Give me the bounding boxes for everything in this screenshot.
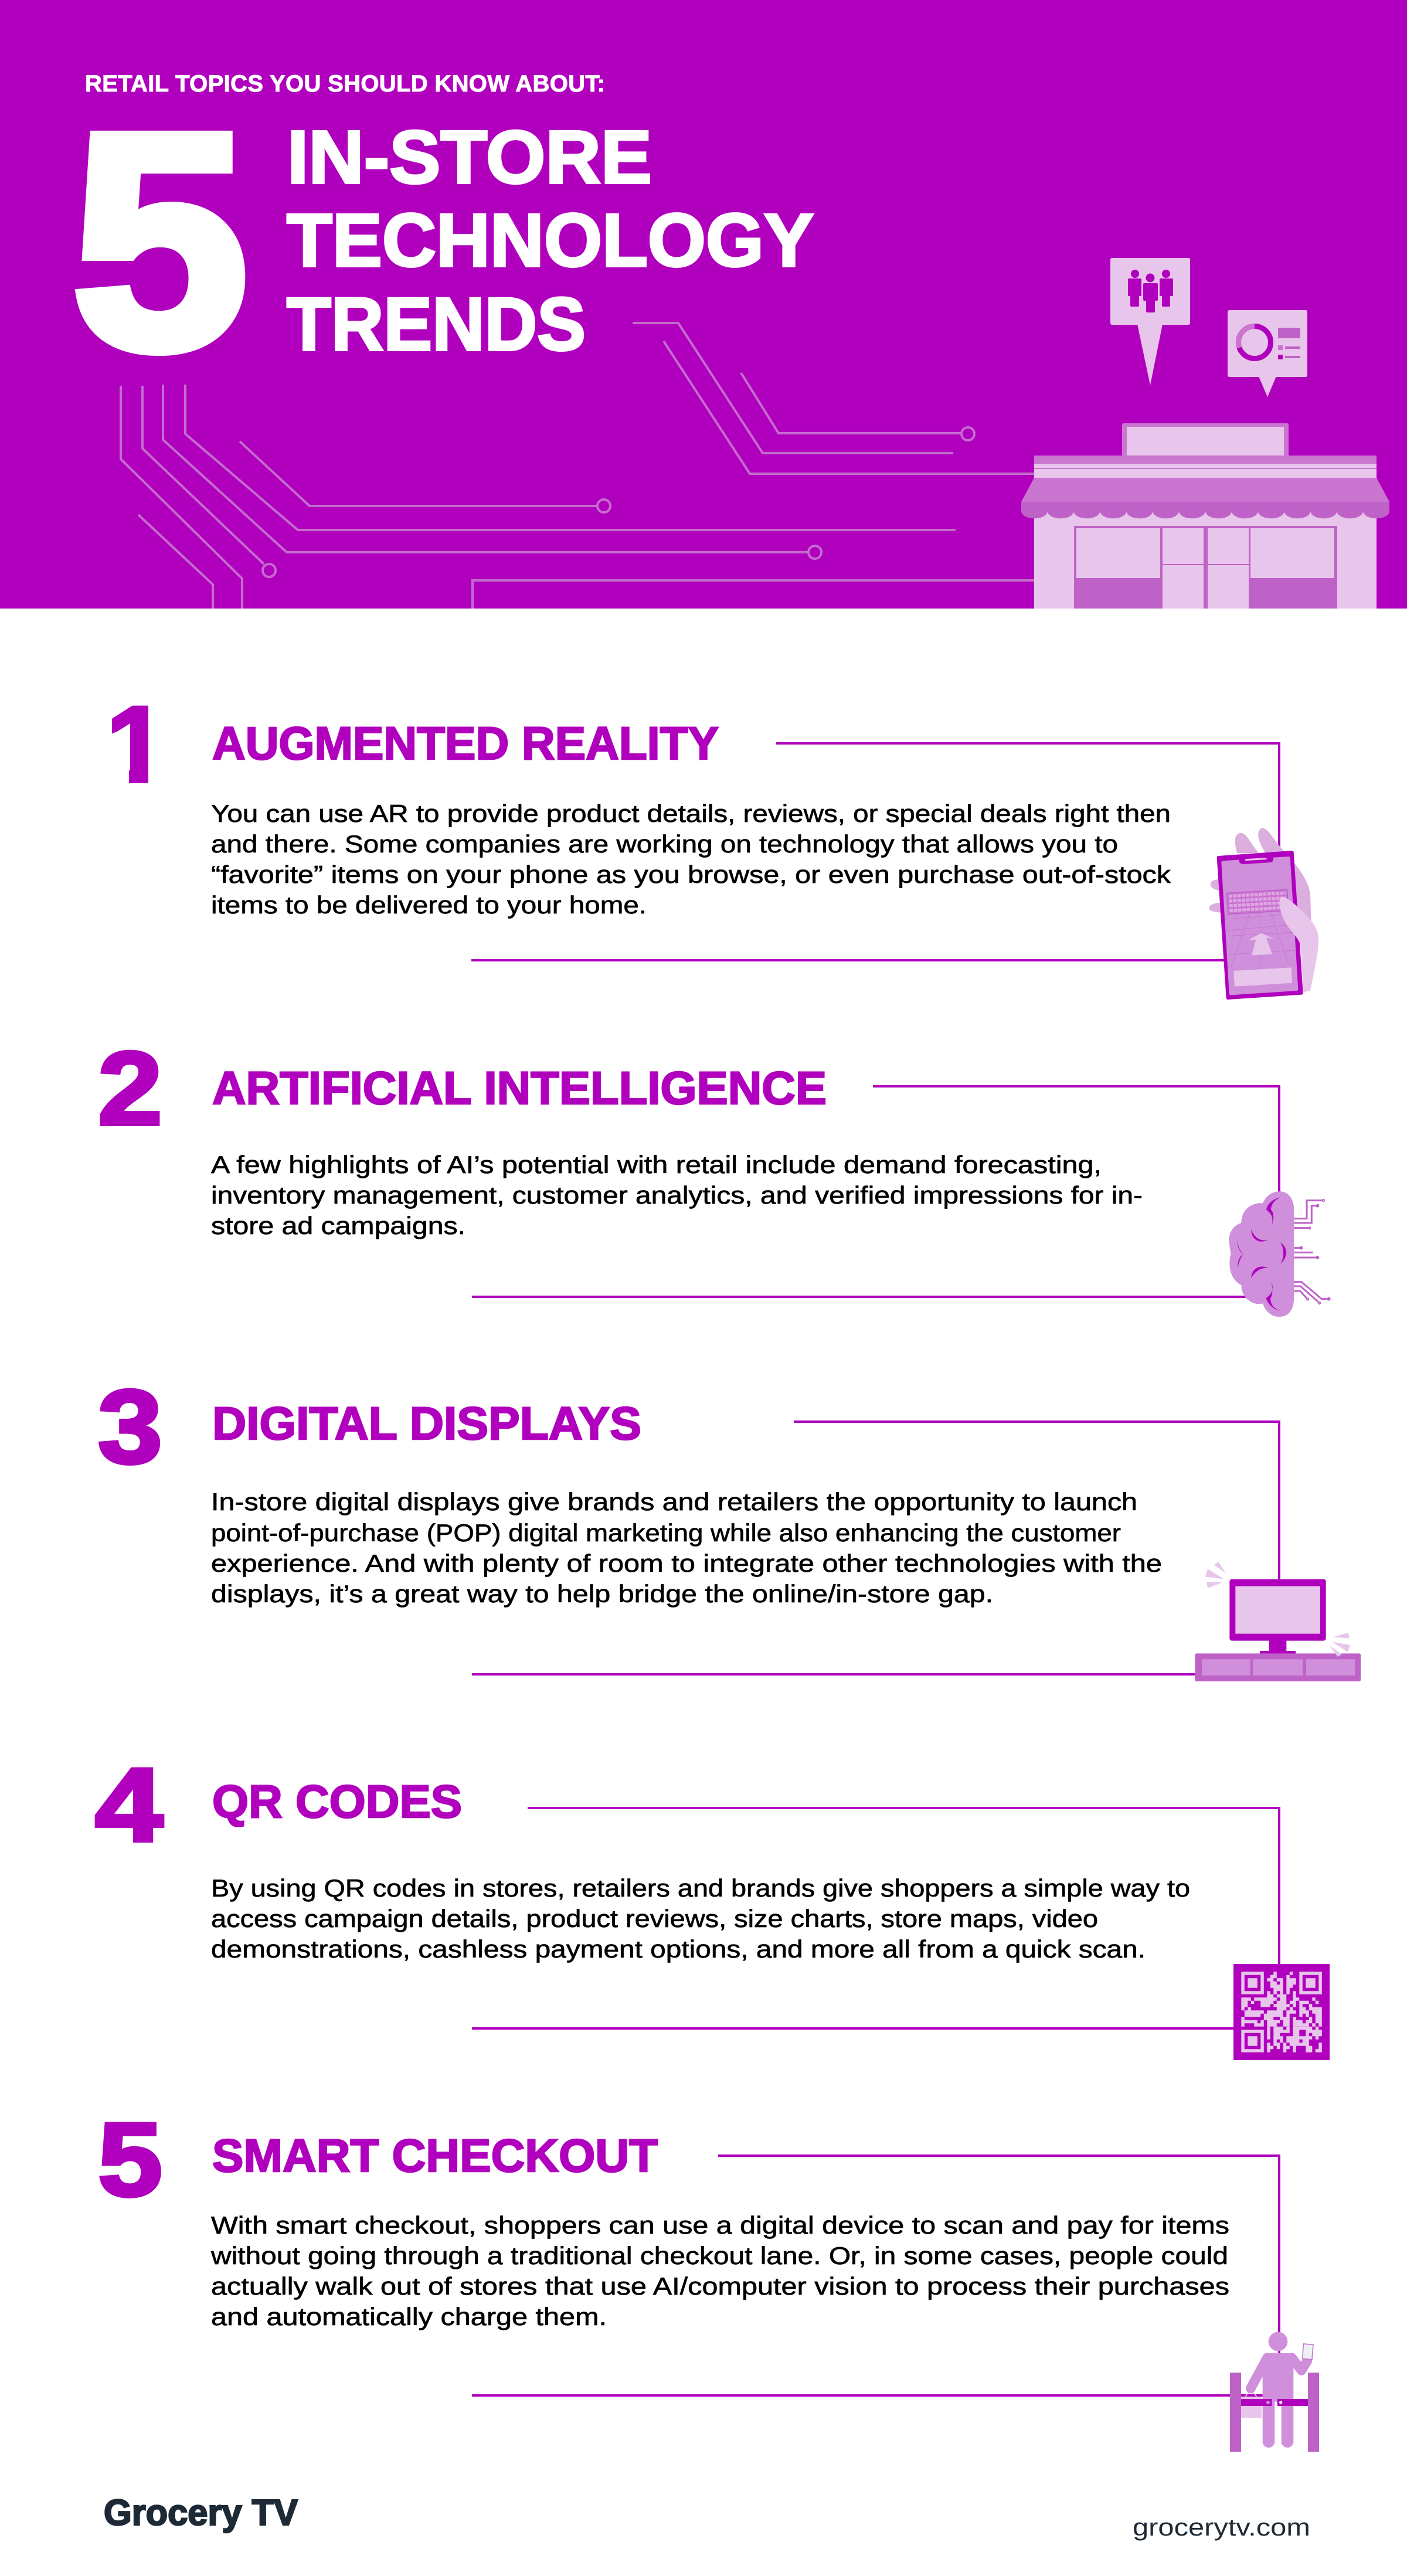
body text: A few highlights of AI’s potential with retail include demand forecasting,: [211, 1151, 1102, 1178]
kicker text: RETAIL TOPICS YOU SHOULD KNOW ABOUT:: [85, 71, 605, 97]
icon: chart speech bubble: [1228, 310, 1307, 397]
body text: access campaign details, product reviews, size charts, store maps, video: [211, 1905, 1098, 1932]
section 1: augmented reality: [106, 684, 1318, 998]
body text: By using QR codes in stores, retailers and brands give shoppers a simple way to: [211, 1874, 1190, 1902]
body text: [211, 1874, 1190, 1963]
body text: With smart checkout, shoppers can use a digital device to scan and pay for items: [211, 2211, 1229, 2239]
body text: without going through a traditional checkout lane. Or, in some cases, people could: [210, 2242, 1228, 2269]
body text: “favorite” items on your phone as you browse, or even purchase out-of-stock: [211, 861, 1171, 888]
section 5: smart checkout: [98, 2101, 1319, 2452]
body text: inventory management, customer analytics, and verified impressions for in-: [211, 1181, 1143, 1209]
title: [287, 115, 814, 366]
connector lines: [472, 1808, 1279, 2028]
header panel: [0, 0, 1407, 609]
circuit lines: [121, 323, 1034, 609]
body text: In-store digital displays give brands and retailers the opportunity to launch: [211, 1488, 1137, 1515]
title: TRENDS: [287, 283, 586, 366]
body text: actually walk out of stores that use AI/computer vision to process their purchases: [211, 2272, 1229, 2300]
icon: phone in hand: [1209, 828, 1318, 998]
body text: point-of-purchase (POP) digital marketing while also enhancing the customer: [211, 1519, 1121, 1547]
body text: and there. Some companies are working on technology that allows you to: [211, 830, 1118, 858]
body text: You can use AR to provide product details, reviews, or special deals right then: [211, 800, 1171, 827]
body text: and automatically charge them.: [211, 2303, 607, 2330]
connector lines: [472, 1422, 1279, 1674]
connector lines: [472, 2156, 1279, 2395]
big number 5: 5: [72, 70, 248, 412]
body text: demonstrations, cashless payment options, and more all from a quick scan.: [211, 1935, 1146, 1963]
body text: [211, 800, 1171, 919]
title: TECHNOLOGY: [287, 199, 814, 283]
section 2: artificial intelligence: [98, 1030, 1331, 1317]
heading: SMART CHECKOUT: [212, 2129, 658, 2181]
body text: experience. And with plenty of room to integrate other technologies with the: [211, 1549, 1162, 1577]
number 4: 4: [95, 1746, 163, 1863]
footer url: grocerytv.com: [1133, 2513, 1310, 2541]
heading: AUGMENTED REALITY: [212, 717, 719, 769]
body text: items to be delivered to your home.: [211, 891, 647, 919]
body text: [211, 1488, 1162, 1608]
heading: QR CODES: [212, 1775, 462, 1827]
number 2: 2: [98, 1030, 162, 1147]
number 3: 3: [98, 1368, 162, 1485]
section 4: qr codes: [95, 1746, 1330, 2060]
icon: digital display on counter: [1195, 1562, 1361, 1681]
footer logo: Grocery TV: [104, 2493, 298, 2533]
heading: DIGITAL DISPLAYS: [212, 1397, 641, 1449]
number 1: 1: [106, 684, 168, 807]
section 3: digital displays: [98, 1368, 1361, 1681]
body text: [210, 2211, 1229, 2330]
icon: shopper at smart gate: [1230, 2316, 1319, 2452]
icon: storefront: [1021, 423, 1389, 609]
number 5: 5: [98, 2101, 162, 2218]
body text: [211, 1151, 1143, 1239]
body text: displays, it’s a great way to help bridge the online/in-store gap.: [211, 1580, 993, 1608]
body text: store ad campaigns.: [211, 1212, 465, 1239]
icon: people speech bubble: [1110, 258, 1190, 385]
connector lines: [471, 743, 1279, 960]
heading: ARTIFICIAL INTELLIGENCE: [212, 1062, 827, 1114]
connector lines: [472, 1086, 1279, 1297]
icon: brain with circuits: [1229, 1191, 1331, 1317]
icon: qr code: [1233, 1964, 1330, 2060]
title: IN-STORE: [287, 115, 652, 199]
